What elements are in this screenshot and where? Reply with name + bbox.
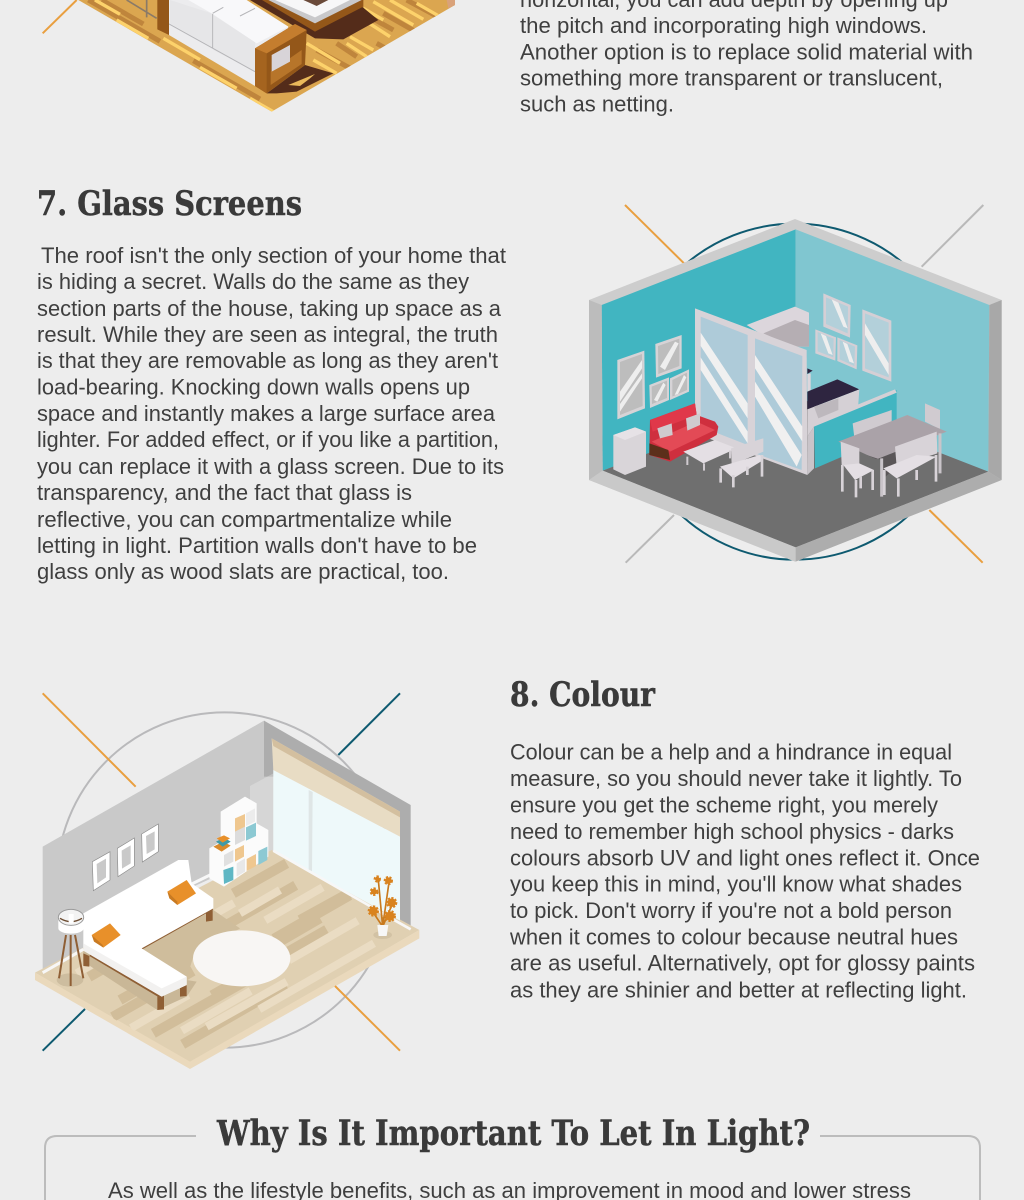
wall pictures [92, 824, 158, 891]
shelving unit [209, 797, 268, 887]
text block: glass screens: transparency, and the fact that glass is [37, 480, 412, 505]
text block: colour [509, 740, 980, 1002]
text block: glass screens: glass only as wood slats are practical, too. [37, 559, 449, 584]
text block: colour: when it comes to colour because neutral hues [509, 924, 958, 950]
panel heading: Why Is It Important To Let In Light? [216, 1113, 810, 1154]
baseboard [43, 875, 210, 973]
text block: glass screens: is hiding a secret. Walls do the same as they [37, 269, 469, 294]
text block: section 6 continued: such as netting. [520, 92, 674, 116]
room shell [589, 219, 1002, 562]
panel: why is it important [45, 1113, 980, 1200]
text block: colour: Colour can be a help and a hindrance in equal [510, 740, 952, 764]
text block: colour: ensure you get the scheme right, you merely [510, 792, 938, 818]
text block: colour: measure, so you should never take it lightly. To [510, 766, 962, 791]
text block: glass screens: result. While they are seen as integral, the truth [37, 322, 498, 347]
text block: section 6 continued: something more transparent or translucent, [520, 66, 943, 90]
potted plant [369, 877, 396, 939]
red sofa [649, 403, 718, 462]
sofa end frame [255, 24, 307, 93]
sofa [157, 0, 288, 86]
circle [57, 712, 392, 1048]
panel border [45, 1136, 980, 1200]
accent lines [43, 693, 400, 1051]
text block: colour: colours absorb UV and light ones reflect it. Once [510, 846, 980, 870]
glass screen [695, 308, 807, 475]
kitchen behind screen [747, 307, 859, 475]
text block: glass screens [37, 243, 506, 584]
text block: glass screens: space and instantly makes a large surface area [37, 401, 496, 426]
right wall pictures [815, 293, 891, 382]
text block: glass screens: lighter. For added effect, or if you like a partition, [37, 427, 499, 452]
half wall [814, 389, 897, 468]
illustration: teal room with glass screen [589, 205, 1002, 563]
floor [35, 850, 419, 1069]
text block: glass screens: load-bearing. Knocking down walls opens up [37, 374, 470, 400]
floor lamp [57, 909, 84, 987]
shaded floor under sofa [142, 910, 240, 978]
illustration: room 6 wooden floor with sofa [43, 0, 455, 112]
side cabinet [613, 427, 646, 475]
walls [43, 721, 411, 973]
text block: section 6 continued [520, 0, 973, 116]
text block: colour: are as useful. Alternatively, opt for glossy paints [510, 950, 975, 976]
round rug [193, 930, 290, 986]
heading: 7. Glass Screens: 7. Glass Screens [37, 184, 302, 224]
text block: glass screens: you can replace it with a glass screen. Due to its [37, 454, 504, 479]
text block: section 6 continued: the pitch and incorporating high windows. [520, 13, 927, 38]
accent lines and circle [625, 205, 983, 563]
dining table and chairs [838, 403, 947, 497]
text block: section 6 continued: Another option is to replace solid material with [520, 40, 973, 64]
text block: colour: as they are shinier and better at reflecting light. [510, 978, 967, 1002]
text block: glass screens: section parts of the house, taking up space as a [37, 296, 502, 321]
text block: glass screens: The roof isn't the only section of your home that [41, 243, 506, 268]
text block: glass screens: is that they are removable as long as they aren't [37, 348, 498, 373]
text block: glass screens: reflective, you can compartmentalize while [37, 507, 452, 532]
left wall pictures [617, 335, 689, 419]
illustration: neutral room with wood floor [35, 693, 419, 1069]
text block: colour: need to remember high school physics - darks [510, 819, 954, 844]
text block: colour: you keep this in mind, you'll know what shades [510, 872, 962, 896]
heading: 8. Colour: 8. Colour [510, 675, 656, 715]
coffee table and armchair [683, 438, 763, 487]
text block: colour: to pick. Don't worry if you're not a bold person [510, 898, 952, 923]
window and blind [272, 738, 411, 929]
text block: glass screens: letting in light. Partition walls don't have to be [37, 533, 477, 558]
white sofa [83, 860, 213, 1010]
